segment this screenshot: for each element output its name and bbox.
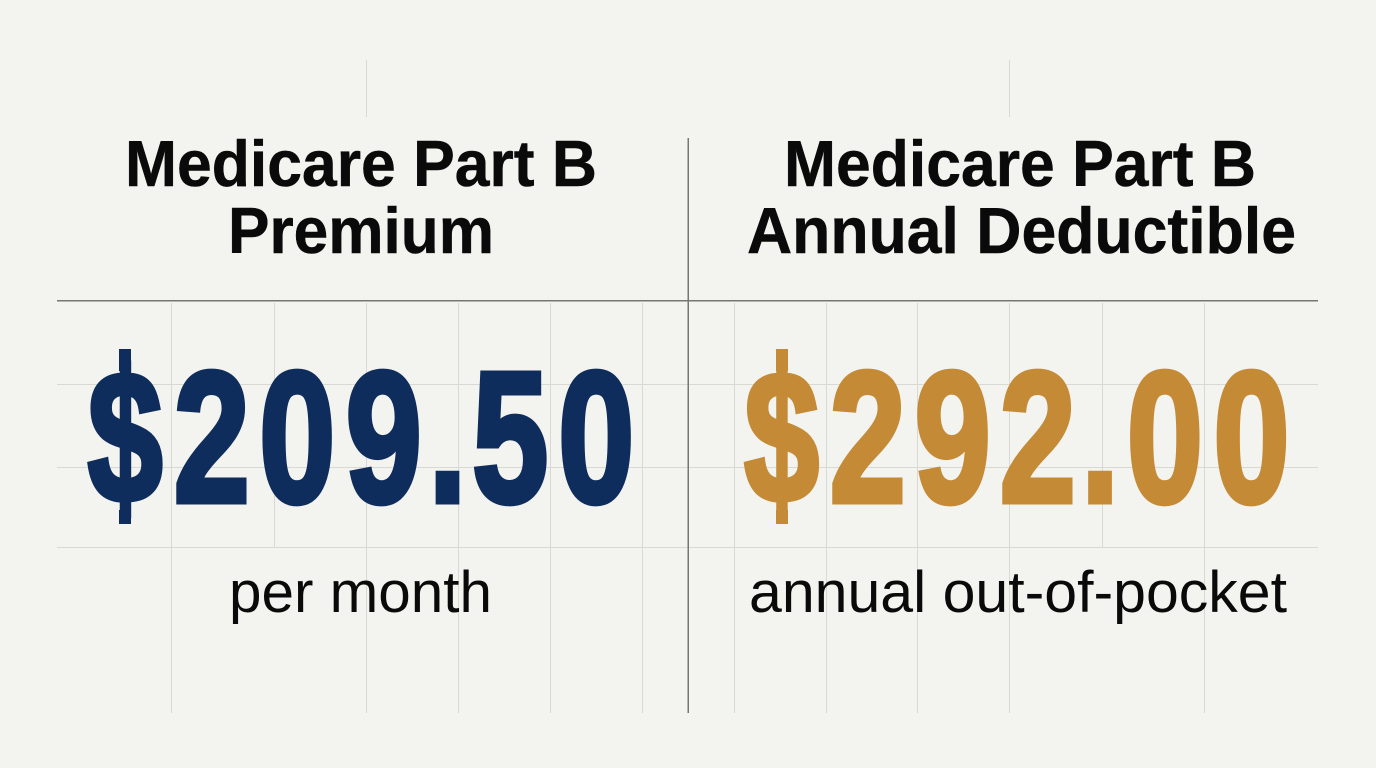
panel: Medicare Part B annual deductible [744, 127, 1296, 625]
heading: premium [125, 127, 597, 267]
big number: deductible amount: 292.00 [830, 333, 1290, 541]
caption: per month: per month [229, 560, 492, 625]
heading: premium: Medicare Part B [125, 127, 597, 200]
heading: annual deductible [747, 127, 1296, 267]
big number: deductible amount: $ [744, 334, 819, 542]
caption: annual out-of-pocket: annual out-of-pocket [749, 560, 1287, 625]
heading: premium: Premium [228, 194, 494, 267]
heading: annual deductible: Medicare Part B [784, 127, 1256, 200]
panel: Medicare Part B premium [88, 127, 634, 625]
big number: premium amount: $ [88, 334, 162, 542]
big number: premium amount: 209.50 [174, 333, 634, 541]
heading: annual deductible: Annual Deductible [747, 194, 1296, 267]
